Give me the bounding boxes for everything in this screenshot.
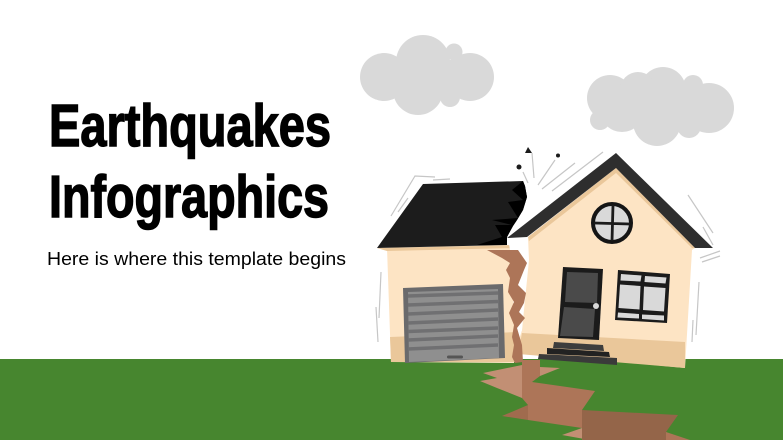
ground — [0, 359, 783, 440]
debris — [516, 147, 560, 170]
garage door — [403, 284, 505, 363]
subtitle: Here is where this template begins — [47, 248, 346, 269]
right roof — [507, 153, 713, 248]
cloud left — [360, 35, 494, 115]
crack in wall — [487, 250, 527, 363]
window — [615, 270, 670, 323]
title: Earthquakes — [49, 93, 331, 159]
tremble lines — [376, 152, 720, 342]
left wing wall — [377, 245, 517, 363]
title: Infographics — [49, 164, 329, 230]
left roof — [377, 181, 527, 248]
white gap in wall — [508, 237, 529, 345]
ground crack — [480, 360, 690, 440]
steps — [538, 342, 617, 365]
house — [377, 153, 713, 368]
title — [49, 93, 331, 230]
right wing wall — [515, 168, 695, 368]
cloud right — [587, 67, 734, 146]
round window — [593, 204, 631, 242]
door — [558, 267, 603, 340]
